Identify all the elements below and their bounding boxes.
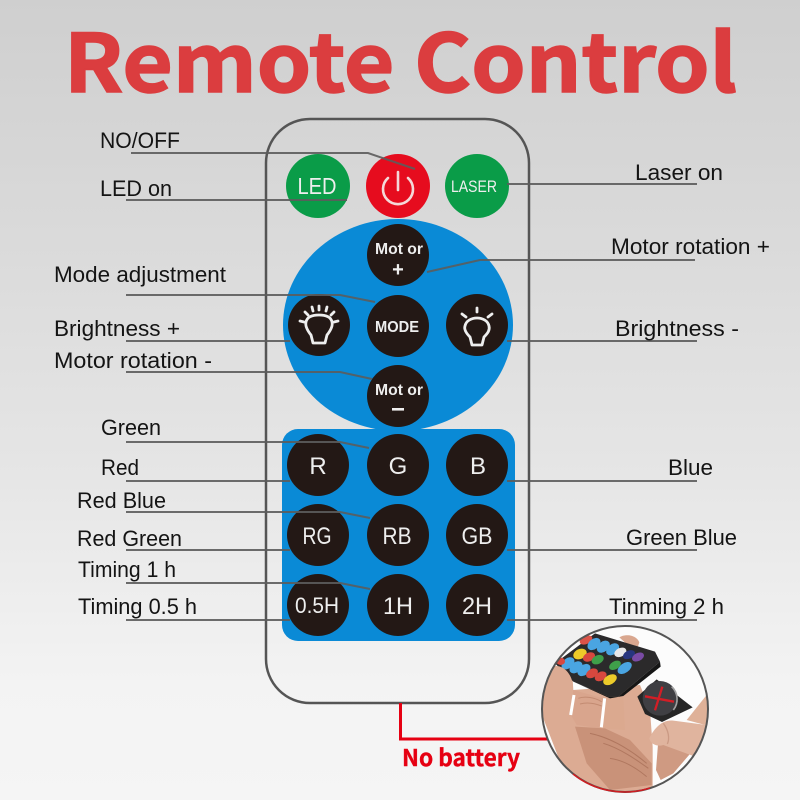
colour and timing buttons: 0.5H: [295, 593, 339, 618]
button: LASER: LASER: [451, 178, 497, 196]
panel: blue colour button area: [282, 429, 515, 641]
label: Red: Red: [101, 455, 139, 480]
label: Red Green: Red Green: [77, 526, 182, 551]
label: NO/OFF: NO/OFF: [100, 128, 180, 153]
colour and timing buttons: RB: [382, 523, 412, 550]
button: motor minus: [367, 365, 429, 427]
red cross: [645, 687, 674, 710]
gaps between fingers: [571, 695, 605, 727]
button: LASER: [445, 154, 509, 218]
button: motor plus: Mot or: [375, 241, 423, 258]
small remote: [555, 633, 660, 697]
colour and timing buttons: R: [309, 453, 327, 480]
colour and timing buttons: 1H: [383, 593, 413, 620]
supporting fingers on the right: [686, 696, 707, 725]
button: power: [366, 154, 430, 218]
label: LED on: LED on: [100, 176, 172, 201]
label: Tinming 2 h: Tinming 2 h: [609, 594, 724, 619]
colour and timing buttons: 2H: [462, 593, 492, 620]
button: motor plus: [367, 224, 429, 286]
button: motor plus: +: [392, 259, 404, 281]
label: Timing 1 h: Timing 1 h: [78, 557, 176, 582]
label: Green: Green: [101, 415, 161, 440]
label: Green Blue: Green Blue: [626, 525, 737, 550]
colour and timing buttons: [287, 434, 508, 636]
label: Mode adjustment: Mode adjustment: [54, 262, 226, 287]
colour and timing buttons: RG: [302, 523, 332, 550]
label: Brightness -: Brightness -: [615, 316, 739, 341]
battery holder: [637, 679, 693, 722]
leader lines: [126, 153, 697, 620]
button: MODE: MODE: [375, 319, 419, 336]
label: Blue: Blue: [668, 455, 713, 480]
photo: hand holding remote with battery crossed out: [540, 626, 712, 797]
remote control body: [266, 119, 529, 703]
label: Laser on: Laser on: [635, 160, 723, 185]
label: Brightness +: Brightness +: [54, 316, 180, 341]
label: No battery: No battery: [402, 739, 520, 773]
colour and timing buttons: B: [470, 453, 486, 480]
label: Red Blue: Red Blue: [77, 488, 166, 513]
button: brightness minus: [446, 294, 508, 356]
title: Remote Control: [64, 0, 737, 116]
button: brightness plus: [288, 294, 350, 356]
button: LED: [286, 154, 350, 218]
label: Timing 0.5 h: Timing 0.5 h: [78, 594, 197, 619]
thumb over remote: [555, 666, 572, 680]
finger behind remote: [619, 635, 640, 646]
left hand: [543, 680, 653, 791]
button: MODE: [367, 295, 429, 357]
red connector line: [400, 703, 548, 739]
panel: blue circular button area: [283, 219, 513, 431]
label: Motor rotation +: Motor rotation +: [611, 234, 770, 259]
colour and timing buttons: G: [389, 453, 407, 480]
colour and timing buttons: GB: [462, 523, 492, 550]
button: motor minus: Mot or: [375, 382, 423, 399]
button: LED: LED: [298, 173, 336, 199]
label: Motor rotation -: Motor rotation -: [54, 348, 212, 373]
